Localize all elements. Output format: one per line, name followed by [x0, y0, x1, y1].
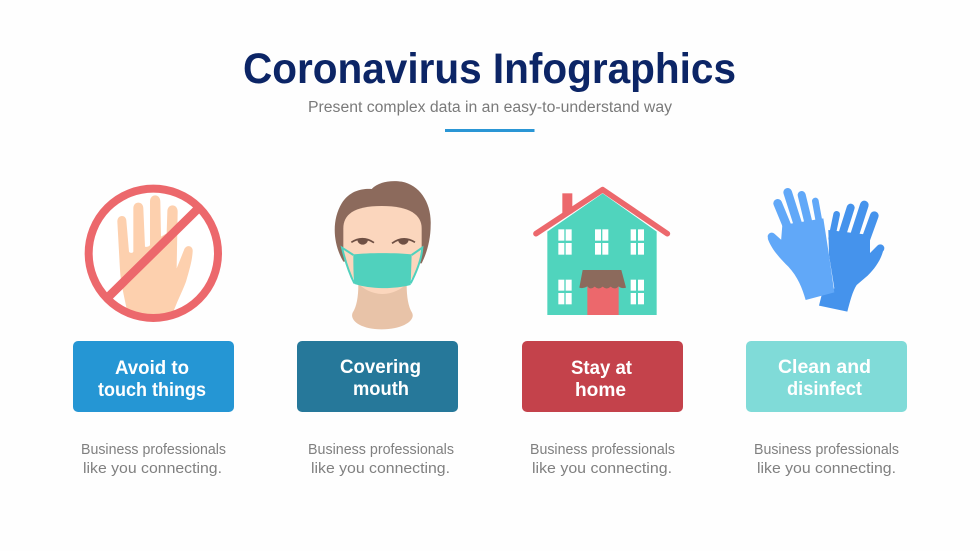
- panel: stay at home: [522, 190, 683, 477]
- description: clean and disinfect: Business professionals: [754, 441, 899, 458]
- label box: avoid to touch things: [73, 341, 234, 412]
- description: avoid to touch things: Business professionals: [81, 441, 226, 458]
- panel: clean and disinfect: [746, 192, 907, 477]
- description: covering mouth: Business professionals: [308, 441, 454, 458]
- title: Coronavirus Infographics: [243, 45, 736, 93]
- label box: covering mouth: [297, 341, 458, 412]
- description: clean and disinfect: like you connecting.: [757, 460, 896, 477]
- label box: avoid to touch things: Avoid to: [115, 358, 189, 379]
- icon: house: [536, 190, 667, 315]
- panel: covering mouth: [297, 181, 458, 477]
- label box: clean and disinfect: Clean and: [778, 357, 871, 378]
- description: avoid to touch things: [81, 441, 226, 477]
- icon: gloves: [768, 192, 883, 312]
- label box: covering mouth: mouth: [353, 379, 409, 400]
- label box: clean and disinfect: disinfect: [787, 379, 863, 400]
- icon: face with mask: [335, 181, 431, 329]
- description: avoid to touch things: like you connecting.: [83, 460, 222, 477]
- description: stay at home: Business professionals: [530, 441, 675, 458]
- description: covering mouth: [308, 441, 454, 477]
- title accent line: [445, 129, 534, 132]
- description: stay at home: like you connecting.: [532, 460, 672, 477]
- subtitle: Present complex data in an easy-to-understand way: [308, 99, 672, 116]
- icon: crossed-out hand: [89, 189, 218, 318]
- label box: stay at home: [522, 341, 683, 412]
- description: stay at home: [530, 441, 675, 477]
- label box: stay at home: Stay at: [571, 358, 633, 379]
- label box: avoid to touch things: touch things: [98, 380, 206, 401]
- label box: clean and disinfect: [746, 341, 907, 412]
- label box: covering mouth: Covering: [340, 357, 421, 378]
- label box: stay at home: home: [575, 380, 626, 401]
- description: covering mouth: like you connecting.: [311, 460, 450, 477]
- description: clean and disinfect: [754, 441, 899, 477]
- panel: avoid to touch things: [73, 189, 234, 477]
